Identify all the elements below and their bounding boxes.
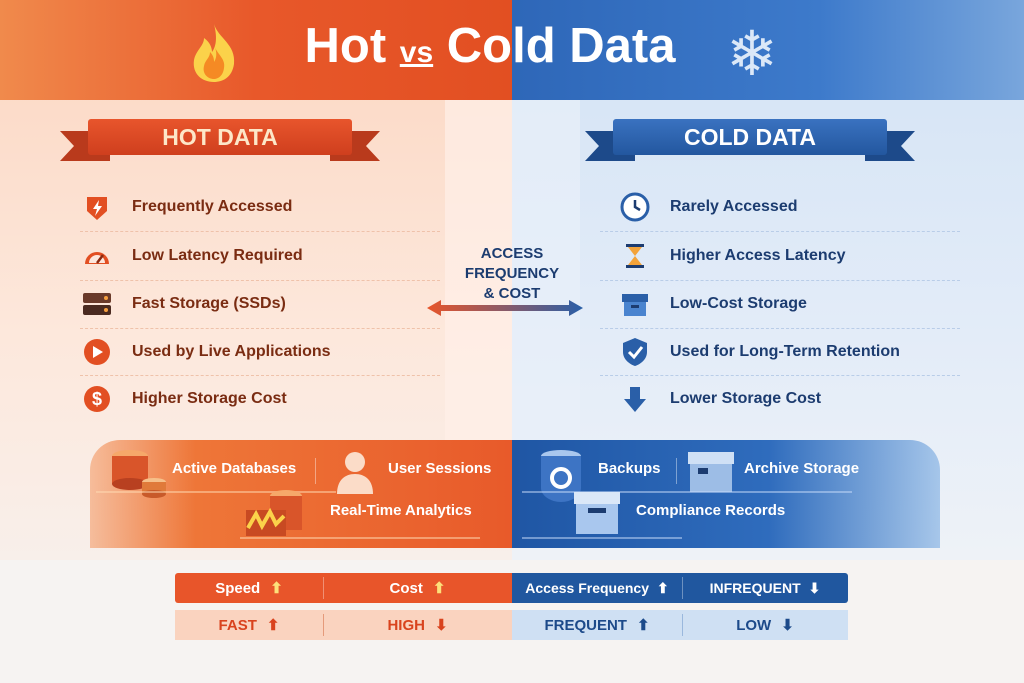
header (0, 0, 1024, 100)
comparison table: ⬆ (270, 580, 283, 597)
ribbon: hot data (60, 119, 380, 161)
icon: backups (541, 450, 581, 502)
item: rarely accessed: Rarely Accessed (670, 198, 798, 215)
item: higher latency (626, 244, 846, 268)
panel: hot examples: User Sessions (388, 460, 491, 477)
item: live applications (84, 339, 331, 365)
list: hot (83, 197, 331, 412)
comparison table: ⬆ (267, 617, 279, 634)
icon: databases (112, 450, 166, 498)
comparison table: ⬆ (433, 580, 445, 597)
item: rarely accessed (620, 192, 798, 222)
arrow: double-headed (427, 300, 583, 316)
item: low cost storage (622, 294, 807, 316)
item: long-term retention: Used for Long-Term Retention (670, 343, 900, 360)
comparison table: ⬇ (781, 617, 794, 634)
icon: archive box (688, 452, 734, 492)
comparison table: FAST (219, 616, 257, 634)
comparison table: Speed (215, 580, 260, 596)
dividers (80, 231, 440, 232)
comparison table: INFREQUENT (710, 580, 801, 596)
comparison table: ⬆ (657, 580, 669, 596)
list: cold (620, 192, 900, 412)
center label: access frequency & cost: FREQUENCY (465, 265, 559, 282)
item: higher cost: Higher Storage Cost (132, 390, 287, 407)
comparison table: LOW (736, 616, 771, 634)
item: higher cost (84, 386, 287, 412)
icon: user (337, 452, 373, 494)
panel: cold examples: Backups (598, 460, 661, 477)
comparison table: ⬇ (435, 617, 448, 634)
center label: access frequency & cost (465, 245, 559, 302)
item: long-term retention (623, 338, 900, 366)
item: lower cost: Lower Storage Cost (670, 390, 821, 407)
icon: analytics (246, 490, 302, 536)
comparison table: Access Frequency (525, 580, 649, 596)
item: frequently accessed (87, 197, 292, 220)
item: higher cost: $ (92, 389, 102, 409)
title: Hot vs Cold Data (305, 19, 675, 73)
item: low latency: Low Latency Required (132, 247, 303, 264)
panel: cold examples (512, 440, 940, 548)
icon: compliance box (574, 492, 620, 534)
item: higher latency: Higher Access Latency (670, 247, 845, 264)
item: live applications: Used by Live Applications (132, 343, 331, 360)
icon: snowflake: ❄ (726, 20, 778, 89)
item: fast storage (83, 293, 286, 315)
ribbon: cold data (585, 119, 915, 161)
item: low cost storage: Low-Cost Storage (670, 295, 807, 312)
comparison table: ⬆ (637, 617, 650, 634)
comparison table: Cost (390, 580, 423, 596)
background columns (0, 0, 512, 560)
icon: fire (194, 24, 234, 82)
panel: cold examples: Archive Storage (744, 460, 859, 477)
panel: hot examples: Active Databases (172, 460, 296, 477)
ribbon: hot data: HOT DATA (162, 124, 278, 150)
center label: access frequency & cost: ACCESS (481, 245, 543, 262)
panel: hot examples: Real-Time Analytics (330, 502, 472, 519)
comparison table: ⬇ (809, 580, 820, 596)
comparison table (175, 573, 848, 640)
item: frequently accessed: Frequently Accessed (132, 198, 292, 215)
panel: hot examples (90, 440, 512, 548)
center label: access frequency & cost: & COST (484, 285, 540, 302)
ribbon: cold data: COLD DATA (684, 124, 816, 150)
item: fast storage: Fast Storage (SSDs) (132, 295, 286, 312)
comparison table: HIGH (387, 616, 425, 634)
item: lower cost (624, 387, 821, 412)
comparison table: FREQUENT (544, 616, 627, 634)
panel: cold examples: Compliance Records (636, 502, 785, 519)
